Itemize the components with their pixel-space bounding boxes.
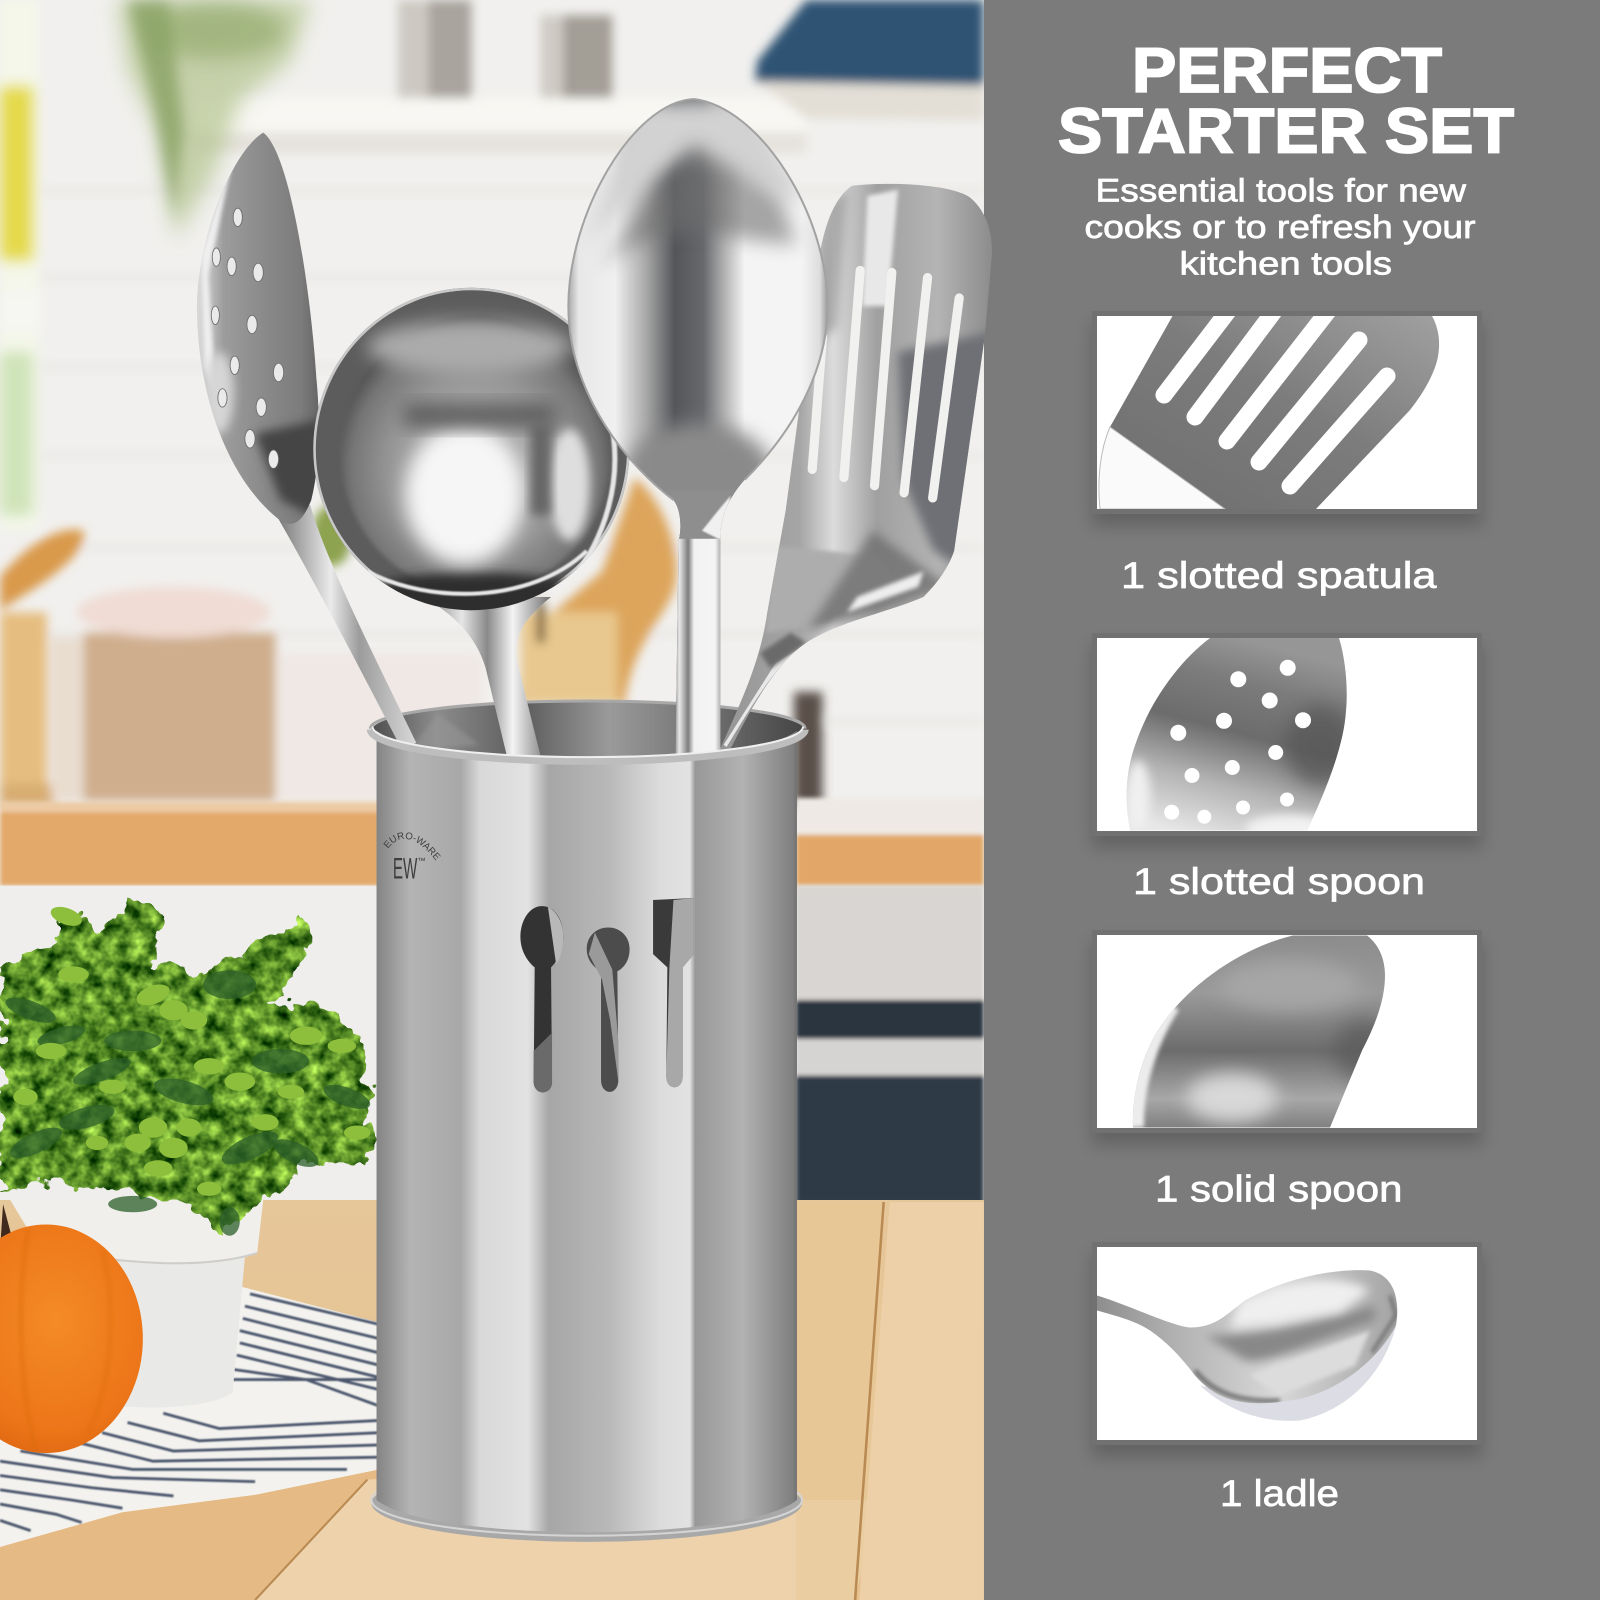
range hood [755, 0, 984, 120]
white plant pot [10, 1200, 263, 1407]
oven [796, 886, 984, 1204]
cutting board [550, 473, 679, 700]
counter [0, 798, 984, 886]
title [1058, 36, 1514, 166]
canister inside [370, 701, 805, 760]
caption: solid spoon: 1 solid spoon [1155, 1168, 1402, 1210]
lower wall [0, 886, 376, 888]
towel [0, 1284, 380, 1547]
wooden items left [0, 530, 84, 806]
subtitle: Essential tools for new [1096, 172, 1467, 208]
cutouts [520, 898, 694, 1092]
window [0, 0, 41, 531]
canister rim [370, 730, 805, 761]
caption: ladle: 1 ladle [1220, 1473, 1339, 1514]
canister behind [794, 692, 822, 806]
pumpkin [0, 1204, 143, 1453]
panel: kitchen product photo [0, 0, 992, 1600]
hanging plant [117, 0, 311, 240]
logo: EURO-WARE [383, 832, 441, 860]
jar [283, 658, 476, 800]
caption: slotted spoon: 1 slotted spoon [1133, 861, 1425, 902]
panel: grey sidebar [984, 0, 1600, 1600]
subtitle [1084, 172, 1476, 282]
utensil: slotted spatula [718, 184, 995, 757]
logo [383, 832, 441, 886]
basket [51, 587, 276, 801]
green plant behind utensils [311, 505, 352, 566]
mugs [398, 0, 612, 98]
subtitle: kitchen tools [1180, 246, 1392, 282]
utensil: slotted spoon [197, 133, 416, 748]
subtitle: cooks or to refresh your [1084, 209, 1476, 245]
photo frame: slotted spatula [1092, 311, 1482, 514]
wall shelf [194, 98, 806, 153]
logo: EW [393, 853, 417, 886]
photo frame: slotted spoon [1092, 632, 1482, 836]
title: STARTER SET [1058, 96, 1514, 166]
photo frame: ladle [1092, 1242, 1482, 1445]
wall planks [41, 189, 984, 722]
utensil: solid spoon [568, 99, 828, 758]
blurred kitchen background [0, 0, 984, 1600]
wooden table [0, 1200, 984, 1600]
stainless steel canister [366, 726, 809, 1542]
caption: slotted spatula: 1 slotted spatula [1121, 555, 1437, 596]
logo: ™ [417, 856, 426, 865]
utensil: ladle [313, 288, 630, 757]
photo frame: solid spoon [1092, 930, 1482, 1133]
title: PERFECT [1132, 36, 1442, 106]
green plant [0, 896, 373, 1236]
